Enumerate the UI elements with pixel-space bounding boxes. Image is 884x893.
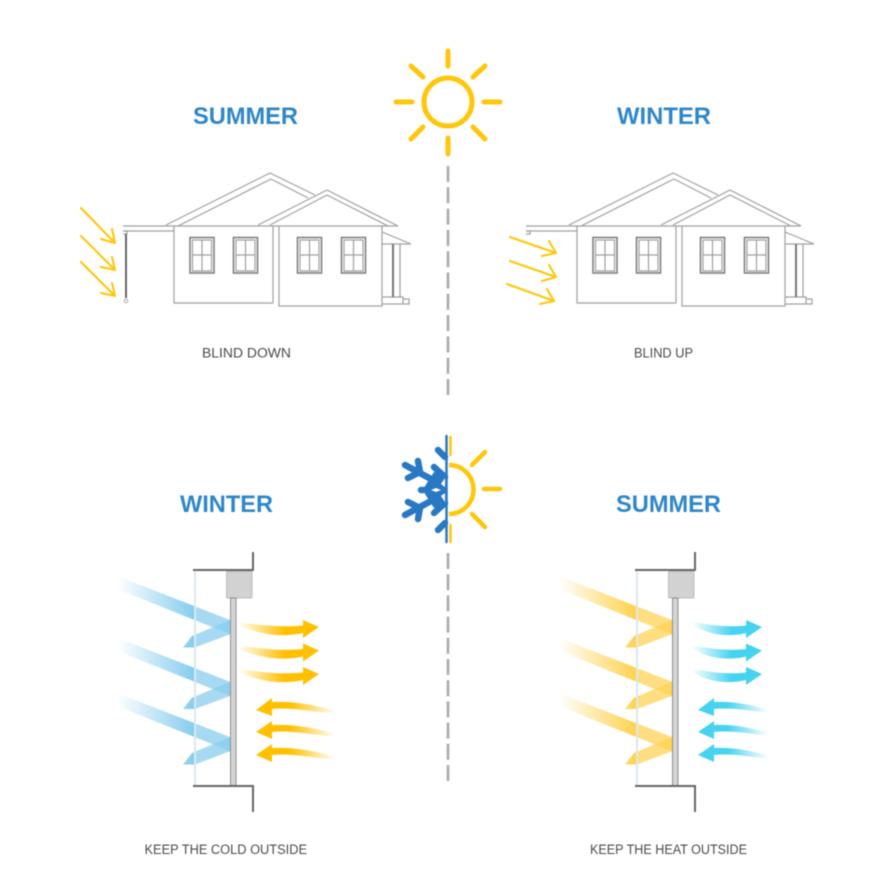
icon: sun bbox=[396, 51, 500, 154]
divider: lower dashed line bbox=[447, 553, 449, 785]
cool air arrows staying inside bbox=[692, 620, 768, 762]
house: blind down bbox=[123, 173, 411, 306]
diagram: winter window keeps cold outside bbox=[117, 552, 336, 812]
warm air arrows staying inside bbox=[238, 620, 336, 762]
heading: winter top: WINTER bbox=[617, 103, 711, 130]
caption: blind up: BLIND UP bbox=[634, 346, 693, 360]
house: blind up bbox=[526, 173, 814, 306]
snowflake bbox=[405, 436, 446, 542]
caption: keep the cold outside: KEEP THE COLD OUTSIDE bbox=[144, 842, 307, 857]
heading: summer bottom: SUMMER bbox=[616, 491, 721, 518]
arrows: sun rays blocked by blind bbox=[81, 208, 115, 296]
caption: keep the heat outside: KEEP THE HEAT OUTSIDE bbox=[590, 842, 747, 857]
wall and window frame bbox=[636, 570, 638, 786]
heading: summer top: SUMMER bbox=[193, 103, 298, 130]
heading: winter bottom: WINTER bbox=[180, 491, 273, 518]
wall and window frame bbox=[194, 570, 196, 786]
icon: snowflake and half sun bbox=[405, 436, 500, 542]
diagram: summer window keeps heat outside bbox=[559, 552, 768, 812]
cold light bands bbox=[117, 576, 230, 764]
arrows: sun rays entering bbox=[507, 237, 556, 304]
divider: upper dashed line bbox=[447, 166, 449, 397]
heat light bands bbox=[559, 576, 672, 764]
caption: blind down: BLIND DOWN bbox=[202, 346, 291, 360]
half sun bbox=[449, 437, 500, 542]
blind: lowered bbox=[123, 231, 128, 303]
